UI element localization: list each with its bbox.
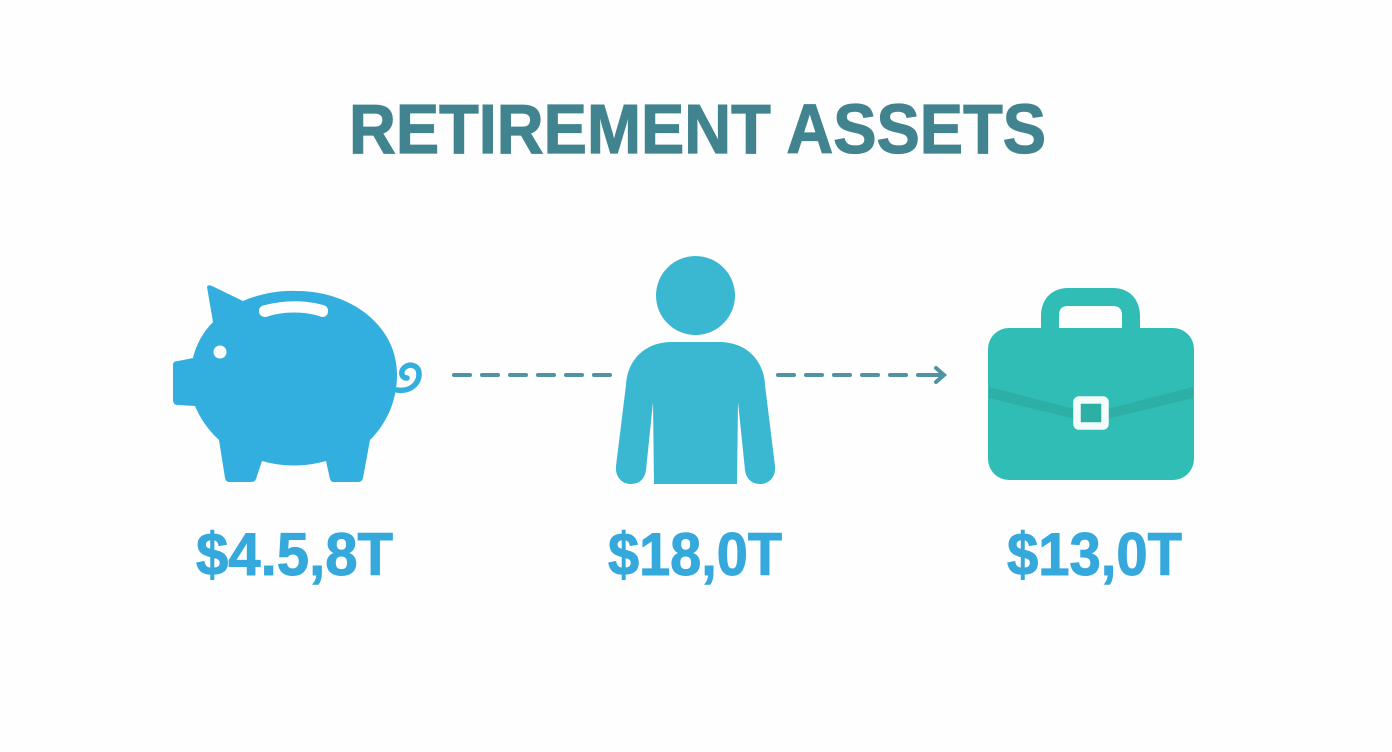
pig tail <box>397 365 419 390</box>
arrow: piggy bank to person <box>454 373 610 377</box>
icon: person <box>616 256 775 484</box>
value: piggy bank: $4.5,8T <box>196 521 393 588</box>
briefcase flap band <box>989 387 1193 419</box>
icon: piggy bank <box>173 285 419 482</box>
arrow: person to briefcase <box>778 368 944 382</box>
briefcase handle <box>1041 288 1140 332</box>
value: briefcase: $13,0T <box>1007 521 1182 588</box>
person head <box>656 256 735 335</box>
value: person: $18,0T <box>608 521 782 588</box>
briefcase buckle <box>1077 400 1105 426</box>
title: RETIREMENT ASSETS <box>349 90 1046 168</box>
person body <box>616 342 775 484</box>
briefcase body <box>988 328 1194 480</box>
icon: briefcase <box>988 288 1194 480</box>
pig coin slot <box>259 301 328 317</box>
pig eye <box>214 346 226 358</box>
